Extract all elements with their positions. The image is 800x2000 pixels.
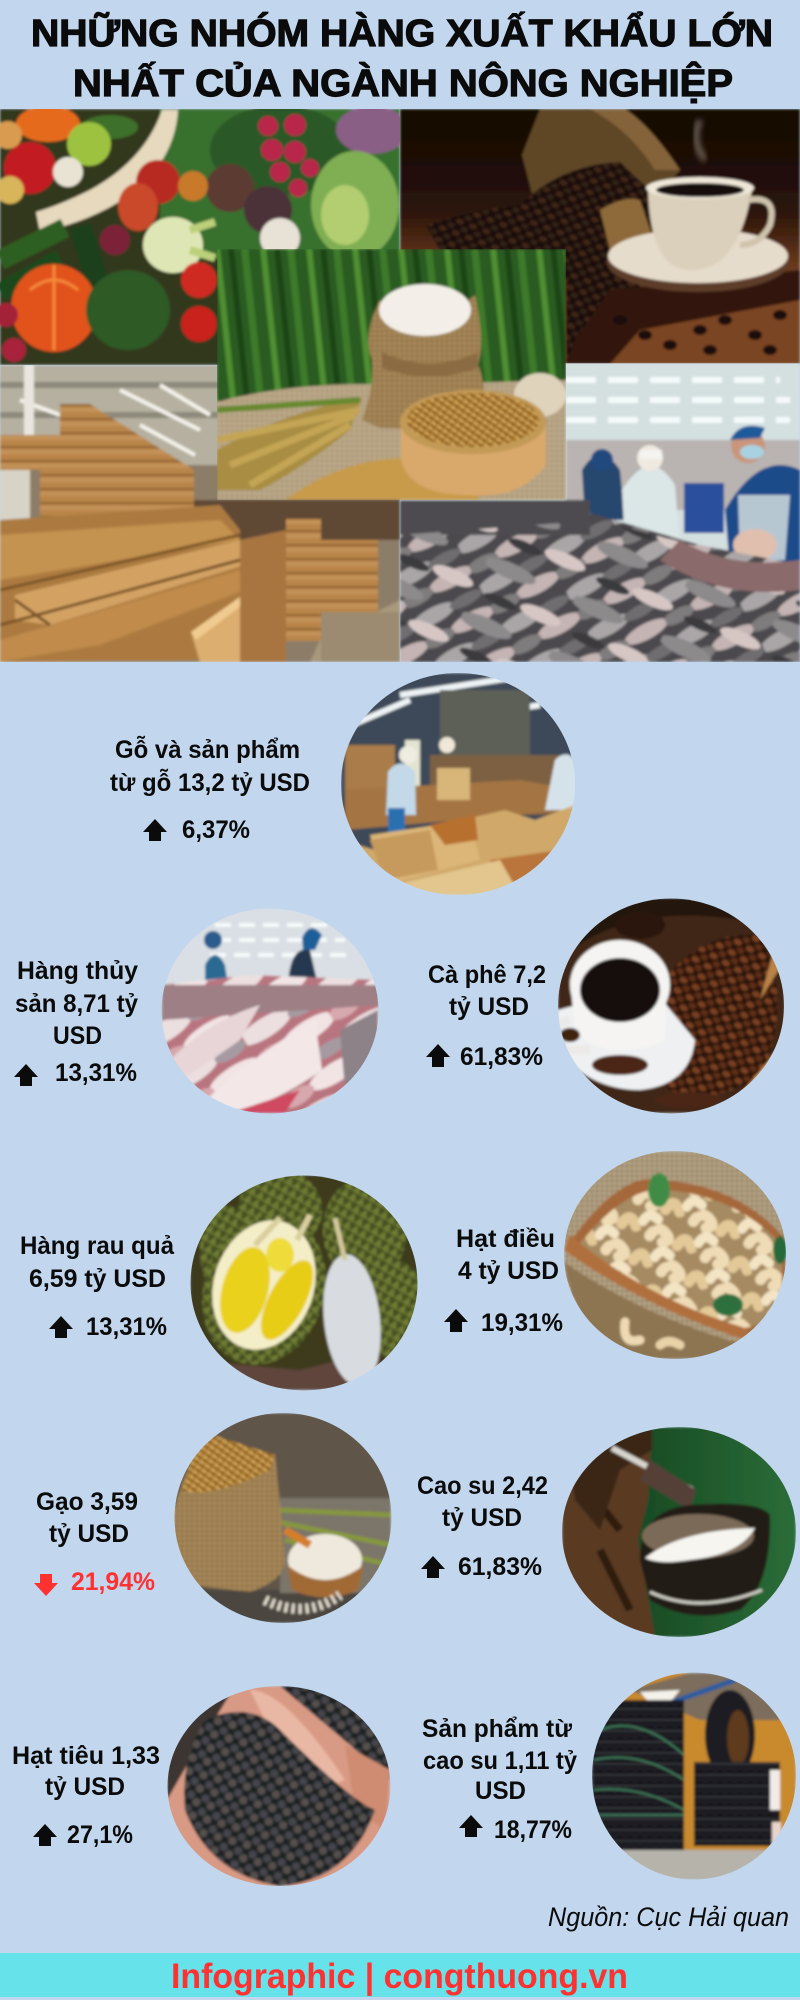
- arrow up: rubber: [421, 1556, 445, 1578]
- photo circle: cashew: [564, 1151, 787, 1359]
- item: rice: tỷ USD: [49, 1520, 129, 1548]
- label: pepper: Hạt tiêu 1,33: [12, 1742, 160, 1770]
- value: coffee: 61,83%: [460, 1043, 543, 1071]
- arrow up: pepper: [33, 1824, 57, 1846]
- label: seafood: Hàng thủy: [17, 957, 138, 985]
- item: rubber products: USD: [475, 1777, 526, 1805]
- item: coffee: [426, 898, 785, 1113]
- photo: rice: [217, 249, 566, 500]
- item: cashew: [444, 1151, 787, 1359]
- item: rice: [34, 1413, 391, 1623]
- item: seafood: sản 8,71 tỷ: [15, 990, 138, 1018]
- label: wood: Gỗ và sản phẩm: [115, 734, 300, 764]
- photo circle: tires: [592, 1673, 796, 1880]
- photo circle: coffee: [556, 898, 785, 1113]
- item: pepper: tỷ USD: [45, 1773, 125, 1801]
- value: rice: 21,94%: [71, 1568, 155, 1596]
- label: cashew: Hạt điều: [456, 1225, 555, 1253]
- title: [31, 10, 773, 105]
- photo: timber: [0, 365, 400, 662]
- title: NHẤT CỦA NGÀNH NÔNG NGHIỆP: [73, 60, 733, 105]
- label: rice: Gạo 3,59: [36, 1488, 138, 1516]
- item: pepper: [12, 1686, 390, 1886]
- source note: Nguồn: Cục Hải quan: [548, 1902, 789, 1932]
- arrow up: cashew: [444, 1309, 468, 1332]
- item: rubber products: cao su 1,11 tỷ: [423, 1747, 577, 1775]
- label: rubber: Cao su 2,42: [417, 1472, 548, 1500]
- item: seafood: [14, 908, 379, 1113]
- photo circle: durian: [183, 1170, 425, 1390]
- arrow up: coffee: [426, 1044, 450, 1067]
- value: pepper: 27,1%: [67, 1821, 133, 1849]
- value: rubber products: 18,77%: [494, 1816, 572, 1844]
- item: seafood: USD: [53, 1022, 102, 1050]
- photo circle: fish: [162, 908, 379, 1113]
- arrow down: rice: [34, 1574, 58, 1596]
- arrow up: wood: [143, 819, 167, 841]
- value: fruit and vegetables: 13,31%: [86, 1313, 167, 1341]
- item: cashew: 4 tỷ USD: [458, 1257, 559, 1285]
- photo circle: rubber: [562, 1427, 796, 1637]
- item: fruit and vegetables: [20, 1170, 425, 1390]
- arrow up: seafood: [14, 1064, 38, 1086]
- arrow up: fruit and vegetables: [49, 1316, 73, 1338]
- item: rubber: [417, 1427, 796, 1637]
- value: seafood: 13,31%: [55, 1059, 137, 1087]
- photo circle: rice: [173, 1413, 391, 1623]
- item: rubber: tỷ USD: [442, 1504, 522, 1532]
- label: fruit and vegetables: Hàng rau quả: [20, 1232, 175, 1260]
- photo: coffee: [400, 109, 800, 364]
- footer bar: [0, 1953, 800, 1997]
- photo circle: pepper: [167, 1686, 390, 1886]
- photo: vegetables: [0, 105, 408, 365]
- item: wood products: [110, 673, 580, 895]
- item: wood products: từ gỗ 13,2 tỷ USD: [110, 767, 310, 797]
- value: rubber: 61,83%: [458, 1553, 542, 1581]
- item: rubber products: [422, 1673, 796, 1880]
- label: rubber products: Sản phẩm từ: [422, 1715, 573, 1743]
- title: NHỮNG NHÓM HÀNG XUẤT KHẨU LỚN: [31, 10, 773, 55]
- photo circle: wood factory: [340, 673, 580, 895]
- photo: seafood processing: [400, 363, 800, 662]
- value: wood: 6,37%: [182, 816, 250, 844]
- photo collage: [0, 105, 800, 662]
- value: cashew: 19,31%: [481, 1309, 563, 1337]
- arrow up: rubber products: [459, 1815, 483, 1837]
- label: coffee: Cà phê 7,2: [428, 961, 546, 989]
- footer text: Infographic | congthuong.vn: [171, 1957, 628, 1996]
- item: coffee: tỷ USD: [449, 993, 529, 1021]
- item: fruit and vegetables: 6,59 tỷ USD: [29, 1265, 166, 1293]
